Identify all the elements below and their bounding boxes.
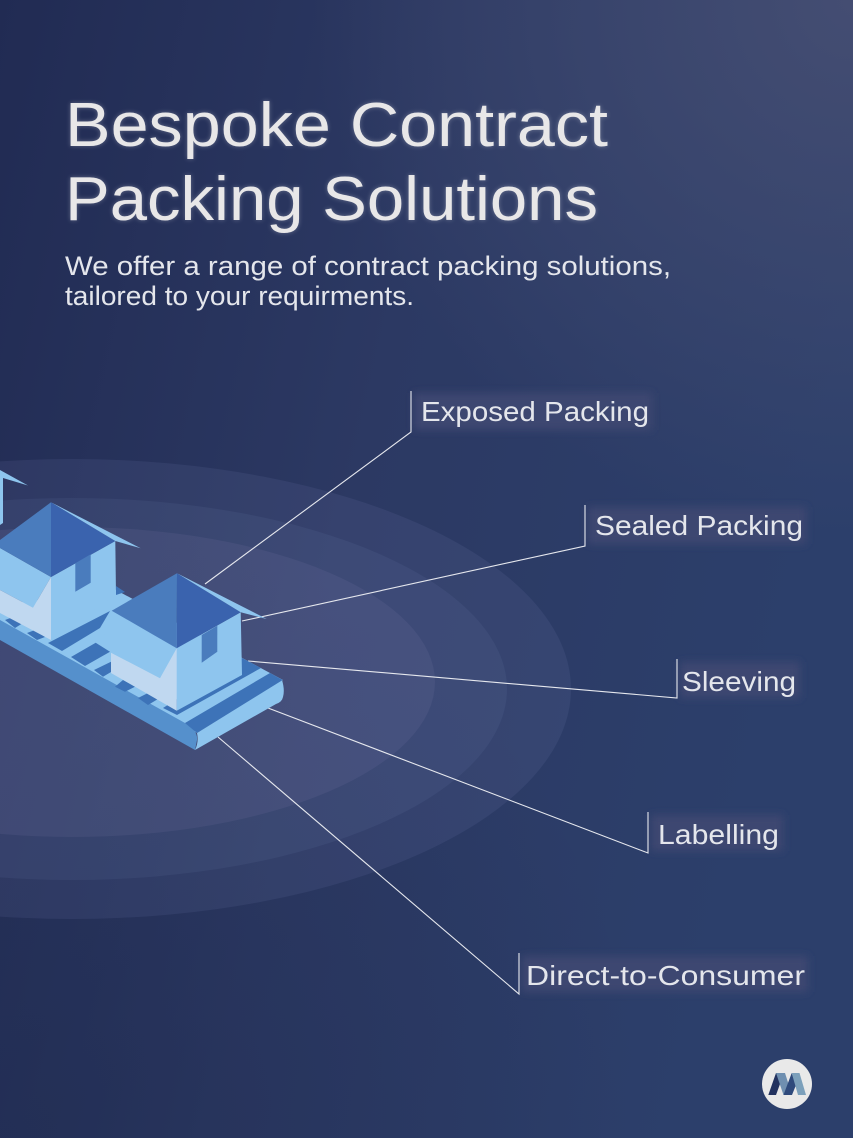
title: Bespoke Contract [65, 91, 608, 160]
conveyor stripes [5, 586, 283, 733]
subtitle [65, 251, 671, 311]
subtitle: tailored to your requirments. [65, 281, 414, 311]
title [65, 91, 608, 234]
label: Sleeving: Sleeving [682, 666, 796, 697]
box: far left partial [0, 470, 28, 525]
label: Labelling: Labelling [658, 819, 779, 850]
logo [762, 1059, 812, 1109]
conveyor front roller [195, 680, 284, 750]
label: Sealed Packing: Sealed Packing [595, 510, 803, 541]
leader lines [205, 391, 677, 994]
box: middle [0, 502, 141, 640]
concentric ellipses [0, 459, 571, 919]
label: Direct-to-Consumer: Direct-to-Consumer [526, 960, 805, 991]
title: Packing Solutions [65, 165, 598, 234]
title: Packing Solutions [65, 165, 598, 234]
label: Exposed Packing: Exposed Packing [421, 396, 649, 427]
conveyor belt top [0, 590, 283, 733]
conveyor with boxes [0, 470, 284, 750]
conveyor side [0, 620, 197, 750]
box: front [102, 573, 267, 711]
title: Bespoke Contract [65, 91, 608, 160]
subtitle: We offer a range of contract packing solutions, [65, 251, 671, 281]
